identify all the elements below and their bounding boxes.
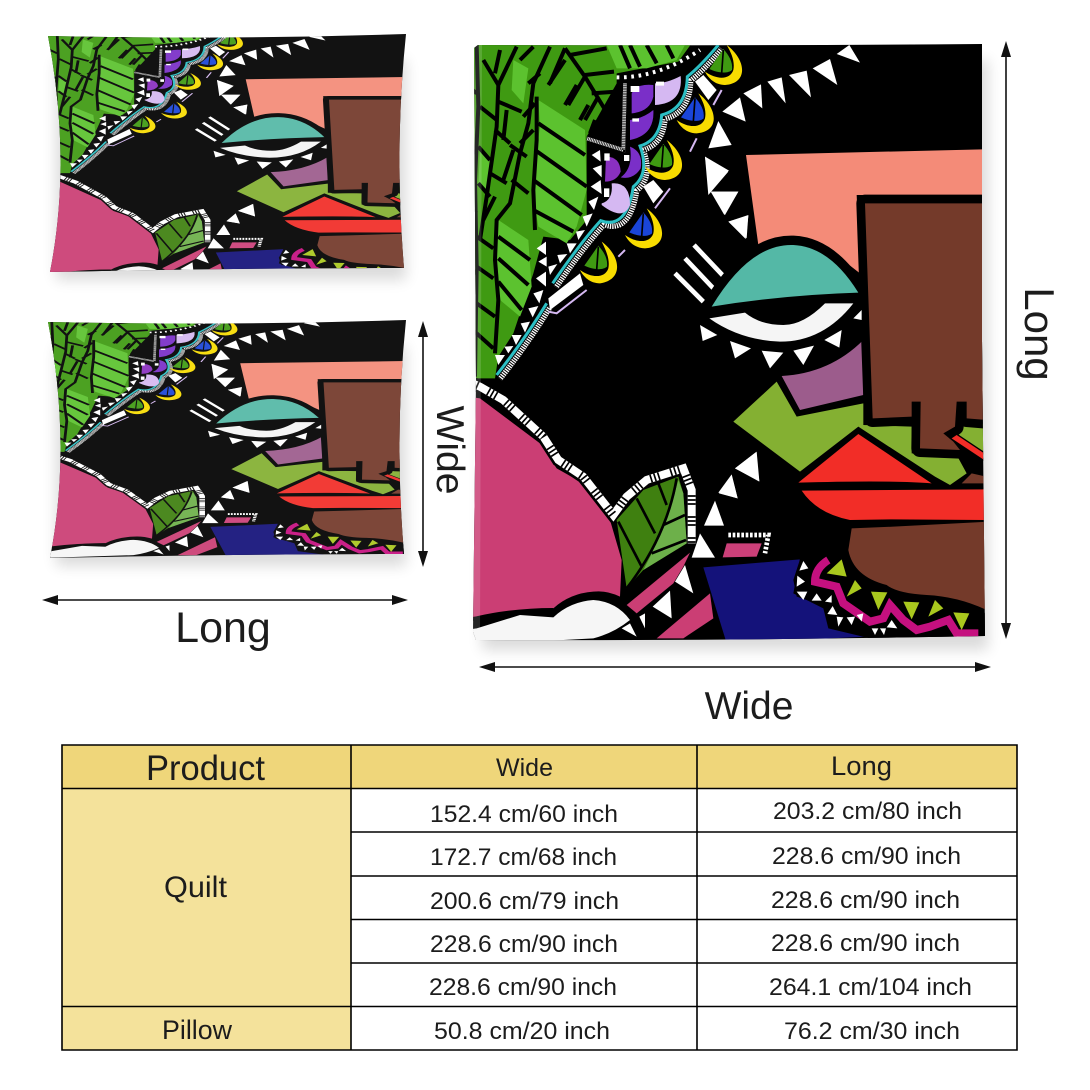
table grid bbox=[62, 745, 1017, 1050]
label: pillow wide: Wide bbox=[428, 406, 471, 494]
arrow: quilt long bbox=[1001, 41, 1011, 639]
hatched square bbox=[587, 83, 625, 150]
trim white triangles bbox=[797, 561, 897, 635]
header text: Long bbox=[831, 751, 892, 781]
face: salmon, eye, nose, lips bbox=[700, 149, 987, 498]
eye white bbox=[709, 303, 853, 342]
arrow: pillow wide bbox=[418, 321, 428, 567]
header text: Wide bbox=[496, 754, 553, 782]
purple scallops bbox=[602, 76, 681, 213]
outer triangle arc upper bbox=[708, 45, 860, 148]
arrow: quilt wide bbox=[479, 662, 991, 672]
long column values: 264.1 cm/104 inch bbox=[769, 974, 972, 1001]
quilt edge folds bbox=[473, 45, 482, 640]
diagonal white triangles bbox=[495, 150, 602, 365]
long column values: 228.6 cm/90 inch bbox=[771, 930, 960, 957]
wide column values: 228.6 cm/90 inch bbox=[429, 974, 617, 1001]
wide column values: 50.8 cm/20 inch bbox=[434, 1018, 610, 1045]
hatched band bbox=[450, 373, 692, 543]
label: quilt long: Long bbox=[1016, 287, 1063, 381]
long column values: 203.2 cm/80 inch bbox=[773, 798, 962, 825]
arrow: pillow long bbox=[42, 595, 408, 605]
header text: Product bbox=[146, 749, 265, 788]
row labels: Quilt bbox=[164, 871, 228, 904]
pillow bottom bbox=[19, 314, 418, 564]
size table bbox=[62, 745, 1017, 1050]
teal mandala line bbox=[497, 45, 718, 375]
light green leaf blocks bbox=[447, 45, 685, 317]
black leaf veins bbox=[457, 45, 673, 377]
outer triangle arc lower bbox=[705, 157, 748, 238]
eye triangles bbox=[700, 157, 862, 498]
purple cheek bbox=[782, 340, 863, 410]
white flower triangles bbox=[622, 452, 759, 637]
long column values: 228.6 cm/90 inch bbox=[772, 843, 961, 870]
product column bbox=[62, 788, 351, 1050]
wide column values bbox=[429, 801, 619, 1045]
blue pot bbox=[703, 559, 867, 643]
white blocks and lilac lines bbox=[548, 75, 717, 310]
lime triangles bbox=[827, 559, 969, 630]
black trim backing bbox=[793, 557, 987, 638]
pink petal bbox=[443, 393, 622, 623]
wide column values: 200.6 cm/79 inch bbox=[430, 888, 619, 915]
yellow crescents bbox=[580, 45, 742, 283]
brown chin bbox=[848, 522, 990, 612]
table header bbox=[62, 745, 1017, 788]
brown nose bbox=[865, 203, 987, 450]
row labels: Pillow bbox=[162, 1015, 232, 1045]
wide column values: 228.6 cm/90 inch bbox=[430, 931, 618, 958]
magenta zigzag bbox=[815, 560, 978, 633]
lower lip, chin, blue pot, magenta trim bbox=[703, 489, 990, 643]
leaves and mandala bbox=[447, 43, 748, 379]
shadows under products bbox=[56, 60, 988, 650]
pink lower leaf bbox=[627, 553, 690, 613]
label: pillow long: Long bbox=[175, 604, 271, 652]
small pink box bbox=[723, 543, 762, 557]
mandala hatched edge bbox=[500, 49, 722, 379]
wide column values: 152.4 cm/60 inch bbox=[430, 801, 618, 828]
upper lip bbox=[798, 434, 932, 483]
long column values bbox=[769, 798, 972, 1045]
crescent leaf interiors bbox=[584, 49, 732, 270]
pillow top bbox=[24, 27, 423, 291]
wide column values: 172.7 cm/68 inch bbox=[430, 844, 617, 871]
dotted arc bbox=[617, 50, 700, 77]
small green leaf bbox=[617, 477, 687, 588]
pink flower and small leaf bbox=[443, 373, 759, 647]
header text bbox=[146, 749, 892, 788]
white cloud bbox=[443, 600, 630, 647]
lower lip bbox=[802, 489, 990, 520]
label: quilt wide: Wide bbox=[705, 685, 793, 728]
teal eyelid bbox=[712, 245, 858, 307]
long column values: 228.6 cm/90 inch bbox=[771, 887, 960, 914]
row labels bbox=[162, 871, 232, 1045]
three white bars bbox=[675, 245, 723, 302]
green leaf base bbox=[447, 43, 692, 378]
long column values: 76.2 cm/30 inch bbox=[784, 1018, 960, 1045]
salmon block bbox=[746, 149, 983, 273]
green diamond bbox=[733, 382, 967, 485]
quilt artwork bbox=[473, 44, 985, 640]
